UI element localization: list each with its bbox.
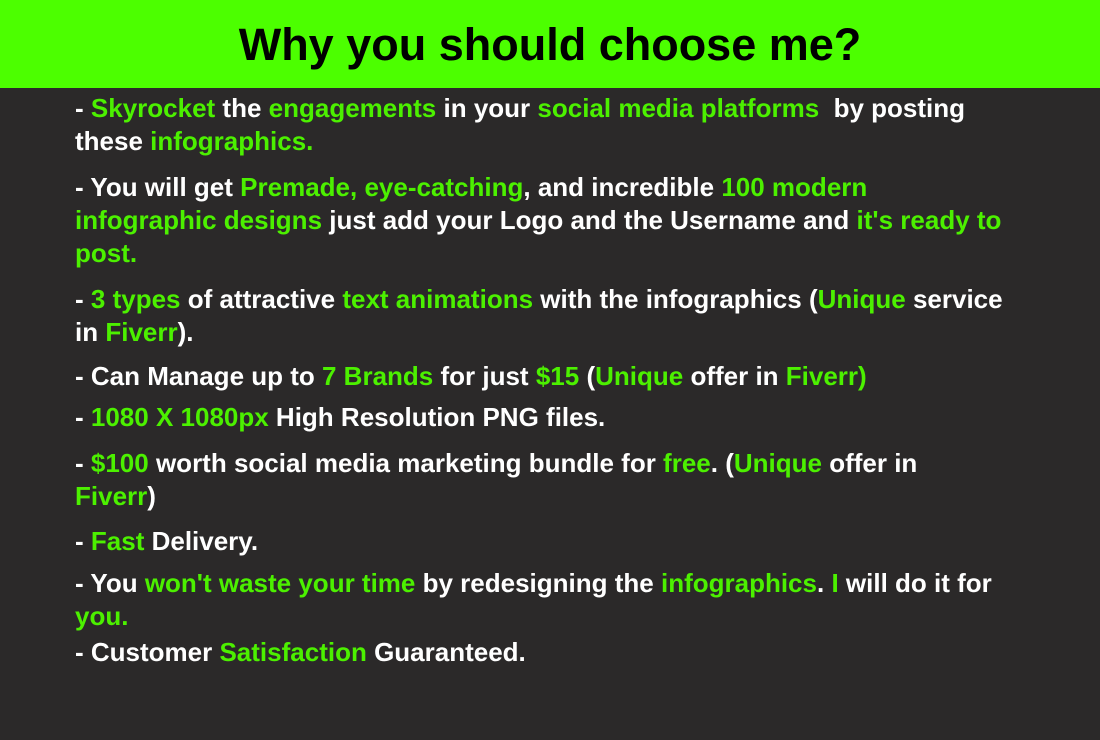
title: Why you should choose me? — [239, 19, 861, 70]
header bar — [0, 0, 1100, 88]
bullet: premade designs — [75, 172, 1001, 268]
bullet: skyrocket: these infographics. — [75, 126, 313, 156]
bullet: bundle: Fiverr) — [75, 481, 156, 511]
bullet: fast delivery: - Fast Delivery. — [75, 526, 258, 556]
bullet: skyrocket: - Skyrocket the engagements in your social media platforms by posting — [75, 93, 965, 123]
bullet: brands: - Can Manage up to 7 Brands for just $15 (Unique offer in Fiverr) — [75, 361, 867, 391]
bullet: premade designs: post. — [75, 238, 137, 268]
bullet: time: - You won't waste your time by redesigning the infographics. I will do it for — [75, 568, 992, 598]
bullet: text animations: - 3 types of attractive text animations with the infographics (Unique service — [75, 284, 1003, 314]
bullet: satisfaction: - Customer Satisfaction Guaranteed. — [75, 637, 526, 667]
bullet: skyrocket — [75, 93, 965, 156]
bullet: premade designs: infographic designs just add your Logo and the Username and it's ready to — [75, 205, 1001, 235]
bullet: text animations: in Fiverr). — [75, 317, 194, 347]
bullet: text animations — [75, 284, 1003, 347]
bullet: bundle — [75, 448, 917, 511]
bullet: bundle: - $100 worth social media marketing bundle for free. (Unique offer in — [75, 448, 917, 478]
bullet: time — [75, 568, 992, 631]
bullet: time: you. — [75, 601, 128, 631]
bullet: premade designs: - You will get Premade, eye-catching, and incredible 100 modern — [75, 172, 867, 202]
bullet: resolution: - 1080 X 1080px High Resolution PNG files. — [75, 402, 605, 432]
